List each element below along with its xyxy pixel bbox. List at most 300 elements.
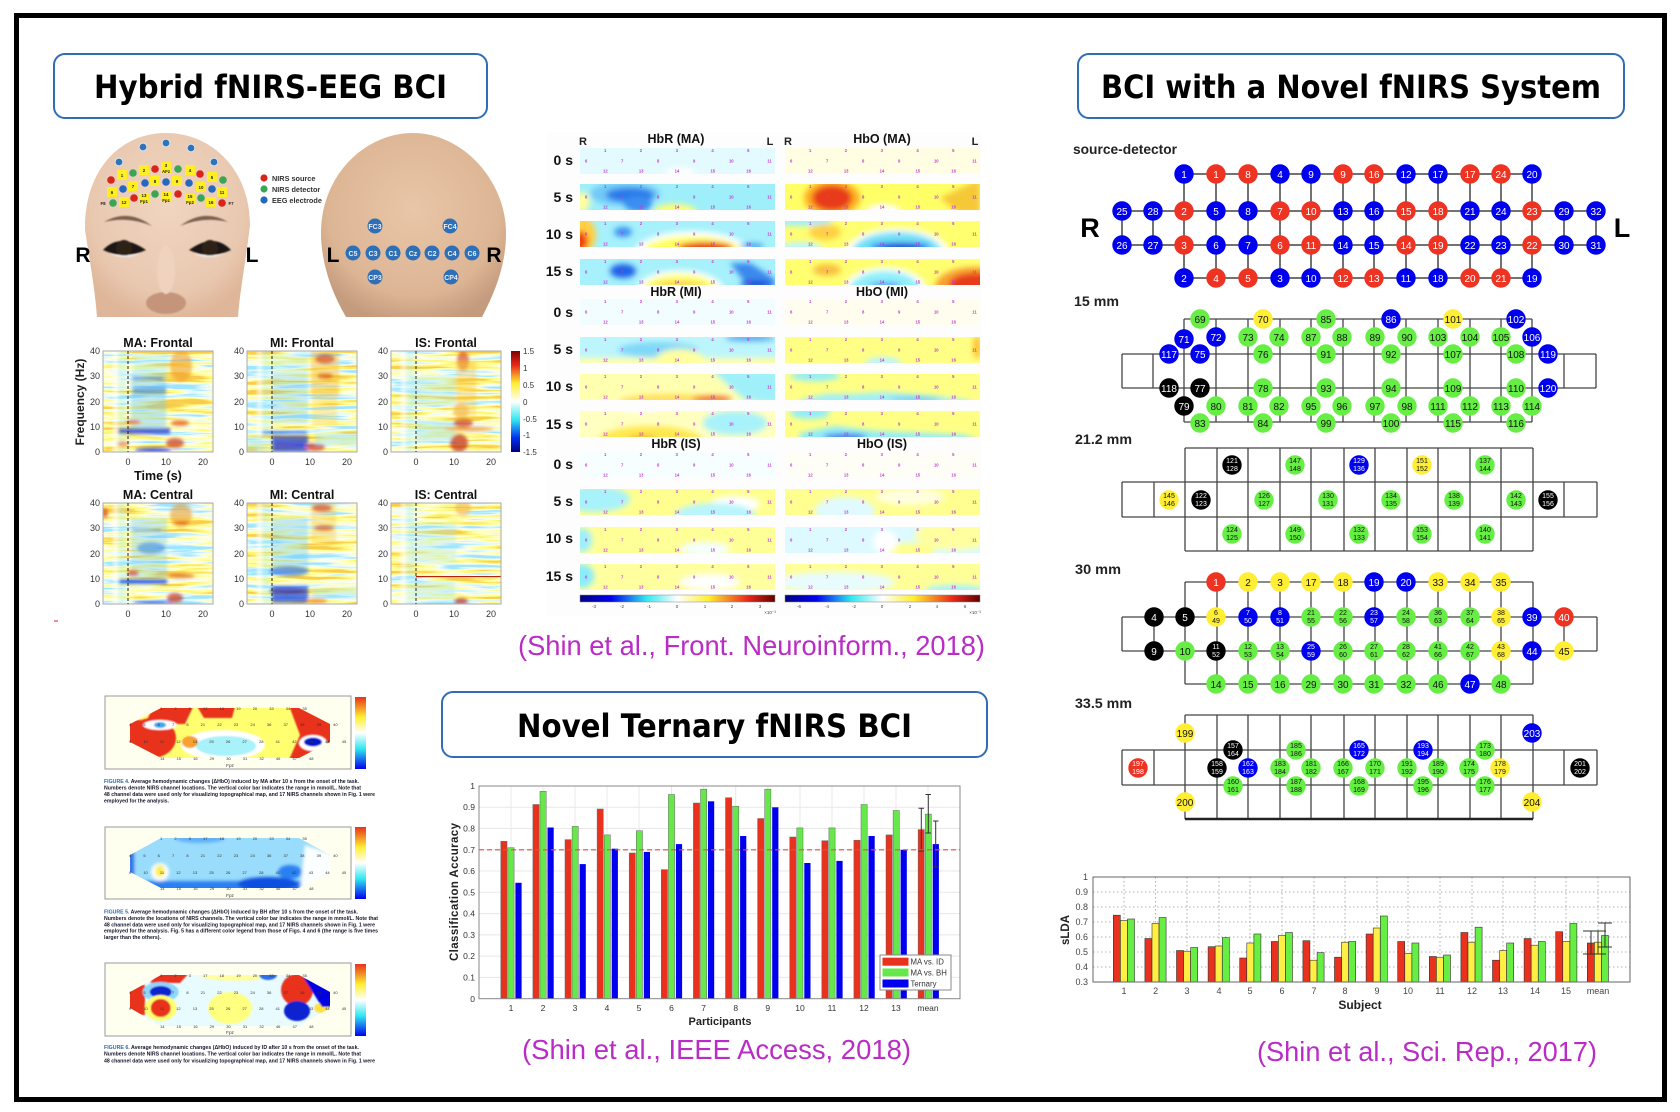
diagram: 21.2 mm channels: 145 <box>1163 493 1175 500</box>
sources (red): 15 <box>1400 207 1412 218</box>
label: 15 mm: 15 mm <box>1074 293 1119 309</box>
detectors (blue): 1 <box>1181 170 1187 181</box>
green channels: 76 <box>1257 350 1269 361</box>
time labels: 10 s <box>546 378 573 394</box>
tick labels: 13 <box>891 1003 901 1013</box>
diagram: 30 mm channels: 17 <box>1305 578 1317 589</box>
montage labels: 15 <box>188 194 193 199</box>
green channels: 88 <box>1336 333 1348 344</box>
legend: Ternary <box>910 980 937 988</box>
montage labels: 3 <box>165 163 168 168</box>
montage labels: 9 <box>176 179 179 184</box>
column and section titles <box>648 132 911 451</box>
green channels: 109 <box>1445 384 1462 395</box>
diagram: 21.2 mm channels: 153 <box>1416 527 1428 534</box>
detectors (blue): 9 <box>1308 170 1314 181</box>
detectors (blue): 27 <box>1147 241 1159 252</box>
spectrogram MI: Central: 10 <box>305 609 315 619</box>
HbR MA 15 s: 1 2 3 4 5 <box>604 259 750 264</box>
column and section titles: HbR (MI) <box>650 285 702 299</box>
tick labels: 10 <box>795 1003 805 1013</box>
HbR MA 0 s <box>580 148 775 176</box>
tick labels: 12 <box>859 1003 869 1013</box>
HbO MI 5 s: 6 7 8 9 10 11 <box>790 347 977 352</box>
green channels: 74 <box>1273 333 1285 344</box>
HbO MA 10 s <box>778 216 980 278</box>
double-numbered channels: 23 <box>1370 610 1378 617</box>
tick labels: 1 <box>470 781 475 791</box>
topographic map: ID <box>105 963 366 1036</box>
HbO MA 10 s: 6 7 8 9 10 11 <box>790 231 977 236</box>
green channels: 82 <box>1273 402 1285 413</box>
HbR IS 5 s <box>560 486 775 527</box>
HbO IS 15 s <box>775 564 985 595</box>
spectrogram IS: Frontal: 0 <box>413 457 419 467</box>
double-numbered channels: 51 <box>1276 618 1284 625</box>
HbO IS 10 s: 1 2 3 4 5 <box>809 527 955 532</box>
sources (red) <box>1174 164 1542 288</box>
diagram: 21.2 mm channels: 129 <box>1353 458 1365 465</box>
diagram: 30 mm channels: 5 <box>1182 613 1188 624</box>
colour bar <box>355 964 366 1036</box>
tick labels: 4 <box>605 1003 610 1013</box>
green channels: 73 <box>1242 333 1254 344</box>
diagram: 21.2 mm channels: 150 <box>1289 535 1301 542</box>
topo colour bars: 3 <box>759 604 762 609</box>
diagram: 33.5 mm channels: 169 <box>1353 787 1365 794</box>
sources (red): 3 <box>1181 241 1187 252</box>
HbR IS 5 s: 1 2 3 4 5 <box>604 489 750 494</box>
green channels: 95 <box>1305 402 1317 413</box>
double-numbered channels: 57 <box>1370 618 1378 625</box>
sources (red): 19 <box>1432 241 1444 252</box>
diagram: 33.5 mm channels: 164 <box>1227 751 1239 758</box>
diagram: 21.2 mm channels: 133 <box>1353 535 1365 542</box>
spectrogram MA: Central: 0 <box>125 609 131 619</box>
tick labels: 13 <box>1498 986 1508 996</box>
diagram: 30 mm channels: 3 <box>1277 578 1283 589</box>
diagram: 30 mm channels: 29 <box>1305 680 1317 691</box>
HbO MA 5 s: 1 2 3 4 5 <box>809 184 955 189</box>
double-numbered channels: 52 <box>1212 652 1220 659</box>
double-numbered channels: 63 <box>1434 618 1442 625</box>
double-numbered channels: 58 <box>1402 618 1410 625</box>
diagram: 33.5 mm channels: 172 <box>1353 751 1365 758</box>
diagram: 21.2 mm channels: 128 <box>1226 466 1238 473</box>
diagram: 21.2 mm channels: 139 <box>1448 501 1460 508</box>
diagram: 33.5 mm channels: 190 <box>1432 769 1444 776</box>
caption: figure 5 <box>104 910 378 941</box>
HbO IS 10 s: 6 7 8 9 10 11 <box>790 537 977 542</box>
spectrogram IS: Frontal: 10 <box>378 422 388 432</box>
topo colour bars: -3 <box>592 604 596 609</box>
sources (red): 6 <box>1277 241 1283 252</box>
spectrogram MA: Central: 30 <box>90 523 100 533</box>
montage labels: 7 <box>132 184 135 189</box>
montage labels: 6 <box>111 190 114 195</box>
spectrogram MI: Central: 30 <box>234 523 244 533</box>
spectrogram colour bar: 0 <box>523 398 528 407</box>
detectors (blue): 21 <box>1464 207 1476 218</box>
front head with NIRS montage: R <box>75 244 91 267</box>
double-numbered channels: 21 <box>1307 610 1315 617</box>
diagram: 33.5 mm channels: 186 <box>1290 751 1302 758</box>
HbR IS 10 s: 6 7 8 9 10 11 <box>585 537 772 542</box>
HbR IS 0 s: 1 2 3 4 5 <box>604 452 750 457</box>
montage legend: EEG electrode <box>272 196 322 205</box>
diagram: 33.5 mm channels: 162 <box>1242 761 1254 768</box>
caption: figure 6: Numbers denote NIRS channel locations. The vertical color bar indicates the range in mmol/L. Note that <box>104 1052 361 1058</box>
spectrogram MI: Frontal: 10 <box>305 457 315 467</box>
double-numbered channels: 26 <box>1339 644 1347 651</box>
diagram: 33.5 mm channels: 188 <box>1290 787 1302 794</box>
tick labels: 7 <box>1311 986 1317 996</box>
HbO MI 0 s: 1 2 3 4 5 <box>809 299 955 304</box>
tick labels <box>463 781 939 1013</box>
detectors (blue): 11 <box>1401 274 1412 285</box>
rear head with EEG montage: C3 <box>369 251 378 258</box>
tick labels: 2 <box>1153 986 1158 996</box>
HbR MI 10 s <box>580 369 780 408</box>
blue channels <box>1159 309 1558 398</box>
montage labels: F8 <box>100 201 106 206</box>
tick labels: 5 <box>637 1003 642 1013</box>
diagram: 33.5 mm channels: 161 <box>1227 787 1239 794</box>
HbO IS 5 s: 6 7 8 9 10 11 <box>790 499 977 504</box>
small red mark <box>54 620 58 622</box>
error bars <box>918 794 938 867</box>
label: 33.5 mm: 33.5 mm <box>1075 695 1132 711</box>
time labels: 10 s <box>546 530 573 546</box>
diagram: source-detector layout <box>1112 164 1606 288</box>
detectors (blue): 31 <box>1590 241 1602 252</box>
tick labels: 4 <box>1216 986 1222 996</box>
time labels: 15 s <box>546 263 573 279</box>
diagram: 33.5 mm channels: 204 <box>1524 798 1541 809</box>
spectrogram colour bar: -0.5 <box>523 415 537 424</box>
double-numbered channels: 7 <box>1246 610 1250 617</box>
HbO MA 15 s: 6 7 8 9 10 11 <box>790 269 977 274</box>
green channels: 81 <box>1242 402 1254 413</box>
green channels: 115 <box>1445 419 1461 430</box>
diagram: 33.5 mm channels: 189 <box>1432 761 1444 768</box>
diagram: 21.2 mm channels: 127 <box>1258 501 1270 508</box>
diagram: 30 mm channels: 46 <box>1432 680 1444 691</box>
HbO MA 5 s: 6 7 8 9 10 11 <box>790 194 977 199</box>
black channels: 118 <box>1161 384 1177 395</box>
diagram: 33.5 mm channels: 191 <box>1401 761 1413 768</box>
HbO MI 0 s <box>785 299 980 325</box>
channel squares <box>107 162 227 207</box>
HbR MA 10 s <box>568 217 775 275</box>
panel: HbR / HbO topographic maps <box>546 132 1015 616</box>
tick labels: 2 <box>541 1003 546 1013</box>
double-numbered channels: 56 <box>1339 618 1347 625</box>
spectrogram IS: Central: 20 <box>486 609 496 619</box>
spectrogram MI: Central <box>234 488 357 619</box>
tick labels: 11 <box>828 1003 837 1013</box>
time labels <box>546 152 573 584</box>
channel numbers: 4 5 6 7 8 21 22 23 24 36 37 38 39 40 <box>129 853 338 858</box>
diagram: 33.5 mm channels: 192 <box>1401 769 1413 776</box>
montage legend <box>260 174 322 205</box>
diagram: 33.5 mm channels: 163 <box>1242 769 1254 776</box>
HbO MI 10 s: 6 7 8 9 10 11 <box>790 384 977 389</box>
label: 21.2 mm: 21.2 mm <box>1075 431 1132 447</box>
HbO MA 10 s: 12 13 14 15 16 <box>808 242 957 246</box>
HbR MA 5 s <box>574 182 775 220</box>
HbR MI 10 s: 12 13 14 15 16 <box>603 394 752 400</box>
green channels: 94 <box>1385 384 1397 395</box>
column and section titles: HbO (MI) <box>856 285 908 299</box>
detectors (blue): 29 <box>1558 207 1570 218</box>
channel numbers: 14 15 16 29 30 31 32 46 47 48 <box>160 756 314 761</box>
tick labels: 1 <box>1121 986 1127 996</box>
time labels: 5 s <box>554 493 573 509</box>
double-numbered channels: 64 <box>1466 618 1474 625</box>
spectrogram MA: Central: 40 <box>90 498 100 508</box>
HbR MI 5 s: 12 13 14 15 16 <box>603 358 752 362</box>
sources (red): 23 <box>1526 207 1538 218</box>
spectrogram MA: Central: 10 <box>161 609 171 619</box>
spectrogram MI: Frontal: 30 <box>234 371 244 381</box>
spectrogram MA: Frontal: 20 <box>198 457 208 467</box>
diagram: 33.5 mm channels: 165 <box>1353 743 1365 750</box>
spectrogram MA: Frontal: 0 <box>125 457 131 467</box>
blue channels: 71 <box>1178 335 1190 346</box>
spectrogram MI: Frontal: 0 <box>269 457 275 467</box>
diagram: 33.5 mm channels: 195 <box>1417 779 1429 786</box>
rear head with EEG montage: CP4 <box>444 275 458 282</box>
diagram: 33.5 mm channels: 199 <box>1177 729 1194 740</box>
HbR IS 15 s <box>570 564 775 590</box>
channel numbers <box>129 836 347 891</box>
spectrogram IS: Central: 40 <box>378 498 388 508</box>
rear head with EEG montage: Cz <box>409 251 418 258</box>
diagram: 30 mm channels: 39 <box>1526 613 1538 624</box>
double-numbered channels: 27 <box>1370 644 1378 651</box>
HbR MI 15 s: 12 13 14 15 16 <box>603 432 752 436</box>
channel numbers: 9 10 11 12 13 25 26 27 28 41 42 43 44 45 <box>129 870 347 875</box>
diagram: 21.2 mm channels: 134 <box>1385 493 1397 500</box>
topo colour bars: 2 <box>731 604 734 609</box>
diagram: 30 mm channels: 47 <box>1464 680 1476 691</box>
tick labels <box>1075 872 1609 996</box>
spectrogram MI: Frontal: 20 <box>342 457 352 467</box>
double-numbered channels: 50 <box>1244 618 1252 625</box>
green channels: 97 <box>1369 402 1381 413</box>
yellow channels: 70 <box>1257 315 1269 326</box>
green channels: 113 <box>1493 402 1509 413</box>
detectors (blue): 6 <box>1213 241 1219 252</box>
tick labels: 0.2 <box>463 951 475 961</box>
green channels: 78 <box>1257 384 1269 395</box>
blue channels: 119 <box>1540 350 1556 361</box>
rear head with EEG montage: R <box>486 244 502 267</box>
time labels: 15 s <box>546 416 573 432</box>
HbR IS 15 s: 1 2 3 4 5 <box>604 564 750 569</box>
topographic map: MA <box>105 696 366 769</box>
heading: BCI with a Novel fNIRS System: BCI with a Novel fNIRS System <box>1101 68 1601 106</box>
double-numbered channels: 41 <box>1434 644 1442 651</box>
double-numbered channels: 22 <box>1339 610 1347 617</box>
legend: MA vs. BH <box>910 968 947 978</box>
tick labels: 1 <box>1083 872 1088 882</box>
tick labels: 3 <box>1184 986 1190 996</box>
diagram: 21.2 mm channels: 144 <box>1479 466 1491 473</box>
caption: figure 5: Numbers denote the locations of NIRS channels. The vertical color bar indicates the range in mmol/L. Note that <box>104 916 378 922</box>
HbO MA 5 s: 12 13 14 15 16 <box>808 204 957 210</box>
diagram: 30 mm channels: 48 <box>1495 680 1507 691</box>
topo colour bars: 4 <box>936 604 939 609</box>
tick labels: 0.5 <box>1075 947 1088 957</box>
blue channels: 102 <box>1508 315 1525 326</box>
double-numbered channels: 49 <box>1212 618 1220 625</box>
tick labels: mean <box>917 1003 939 1013</box>
channel numbers <box>129 973 347 1029</box>
diagram: 30 mm channels: 31 <box>1368 680 1380 691</box>
channel numbers: 14 15 16 29 30 31 32 46 47 48 <box>160 886 314 891</box>
montage labels: Fp1 <box>140 199 148 204</box>
diagram: 33.5 mm channels: 160 <box>1227 779 1239 786</box>
channel numbers: 1 2 3 17 18 19 20 33 34 35 <box>160 836 308 841</box>
spectrogram IS: Central: 0 <box>413 609 419 619</box>
diagram: 33.5 mm channels: 193 <box>1417 743 1429 750</box>
tick labels: 0.7 <box>463 845 475 855</box>
legend: MA vs. ID <box>910 958 944 966</box>
HbR IS 15 s: 12 13 14 15 16 <box>603 584 752 590</box>
sources (red): 18 <box>1432 207 1444 218</box>
diagram: 21.2 mm channels: 138 <box>1448 493 1460 500</box>
spectrogram MI: Central: 0 <box>239 599 244 609</box>
black channels: 77 <box>1194 384 1206 395</box>
montage labels: 8 <box>154 179 157 184</box>
caption: figure 4 <box>104 779 375 804</box>
channel numbers: 9 10 11 12 13 25 26 27 28 41 42 43 44 45 <box>129 739 347 744</box>
HbR MI 0 s: 1 2 3 4 5 <box>604 299 750 304</box>
green channels: 91 <box>1320 350 1332 361</box>
spectrogram IS: Central: 10 <box>449 609 459 619</box>
diagram: 33.5 mm channels: 196 <box>1417 787 1429 794</box>
detectors (blue): 13 <box>1337 207 1349 218</box>
HbO IS 5 s <box>785 489 980 525</box>
diagram: 21.2 mm channels: 146 <box>1163 501 1175 508</box>
double-numbered channels: 11 <box>1212 644 1220 651</box>
spectrogram IS: Central: 30 <box>378 523 388 533</box>
bar chart: sLDA accuracy: Subject <box>1338 998 1382 1012</box>
diagram: 21.2 mm channels: 135 <box>1385 501 1397 508</box>
column and section titles: HbR (MA) <box>648 132 704 146</box>
HbO IS 0 s: 12 13 14 15 16 <box>808 472 957 478</box>
spectrogram MA: Central: 20 <box>198 609 208 619</box>
green channels: 99 <box>1320 419 1332 430</box>
HbO MI 5 s: 1 2 3 4 5 <box>809 337 955 342</box>
HbR IS 0 s: 6 7 8 9 10 11 <box>585 462 772 467</box>
topo colour bars: 1 <box>704 604 707 609</box>
green channels: 92 <box>1385 350 1397 361</box>
diagram: 21.2 mm channels: 147 <box>1289 458 1301 465</box>
double-numbered channels: 66 <box>1434 652 1442 659</box>
rear head with EEG montage: C5 <box>349 251 358 258</box>
spectrogram IS: Frontal: 20 <box>486 457 496 467</box>
diagram: 21.2 mm channels: 136 <box>1353 466 1365 473</box>
spectrogram IS: Central: 20 <box>378 549 388 559</box>
HbR IS 10 s <box>572 527 775 556</box>
HbR MI 0 s: 12 13 14 15 16 <box>603 320 752 324</box>
topo colour bars: -2 <box>852 604 856 609</box>
diagram: 21.2 mm channels: 151 <box>1416 458 1428 465</box>
diagram: 21.2 mm channels: 152 <box>1416 466 1428 473</box>
diagram: 21.2 mm channels: 130 <box>1322 493 1334 500</box>
time labels: 15 s <box>546 568 573 584</box>
spectrogram colour bar: 1 <box>523 364 528 373</box>
green channels: 107 <box>1445 350 1462 361</box>
HbO IS 10 s <box>785 520 995 559</box>
green channels: 110 <box>1508 384 1524 395</box>
sources (red): 10 <box>1305 207 1317 218</box>
diagram: 33.5 mm channels: 182 <box>1305 769 1317 776</box>
HbO MI 5 s: 12 13 14 15 16 <box>808 358 957 362</box>
spectrogram IS: Frontal: 30 <box>378 371 388 381</box>
rear head with EEG montage: C4 <box>448 251 457 258</box>
diagram: 33.5 mm channels: 173 <box>1479 743 1491 750</box>
sources (red): 16 <box>1368 170 1380 181</box>
spectrogram colour bar <box>511 347 537 457</box>
montage labels: 14 <box>164 192 169 197</box>
tick labels: 1 <box>509 1003 514 1013</box>
spectrogram MI: Central: 20 <box>342 609 352 619</box>
tick labels: 0.5 <box>463 888 475 898</box>
sources (red): 9 <box>1340 170 1346 181</box>
montage legend: NIRS source <box>272 174 315 183</box>
double-numbered channels: 67 <box>1466 652 1474 659</box>
tick labels: 0.7 <box>1075 917 1088 927</box>
detectors (blue): 14 <box>1337 241 1349 252</box>
caption: figure 6: 48 channel data were used only for visualizing topographical map, and 17 NIRS channels shown in Fig. 1 were <box>104 1058 375 1064</box>
NIRS detectors <box>109 165 227 207</box>
column and section titles: HbO (MA) <box>853 132 911 146</box>
diagram: 30 mm channels: 32 <box>1400 680 1412 691</box>
green channels: 103 <box>1430 333 1447 344</box>
montage legend: NIRS detector <box>272 185 320 194</box>
HbO MI 5 s <box>785 335 981 371</box>
diagram: 21.2 mm channels: 126 <box>1258 493 1270 500</box>
sources (red): 24 <box>1495 170 1507 181</box>
citation: Sci. Rep.: (Shin et al., Sci. Rep., 2017) <box>1257 1036 1597 1067</box>
detectors (blue): 10 <box>1305 274 1317 285</box>
HbO MA 0 s: 1 2 3 4 5 <box>809 148 955 153</box>
green channels: 90 <box>1401 333 1413 344</box>
green channels: 87 <box>1305 333 1317 344</box>
green channels: 69 <box>1194 315 1206 326</box>
tick labels: 0.1 <box>463 972 475 982</box>
spectrogram MA: Central: 20 <box>90 549 100 559</box>
diagram: 30 mm channels: 35 <box>1495 578 1507 589</box>
tick labels: 0.4 <box>463 908 475 918</box>
caption: figure 4: Numbers denote NIRS channel locations. The vertical color bar indicates the range in mmol/L. Note that <box>104 786 361 792</box>
diagram: 33.5 mm channels: 197 <box>1132 761 1144 768</box>
caption: figure 4: 48 channel data were used only for visualizing topographical map, and 17 NIRS channels shown in Fig. 1 were <box>104 792 375 798</box>
heading: Novel Ternary fNIRS BCI: Novel Ternary fNIRS BCI <box>517 707 912 745</box>
HbR IS 10 s: 1 2 3 4 5 <box>604 527 750 532</box>
diagram: 30 mm channels: 1 <box>1213 578 1219 589</box>
montage labels: 10 <box>199 185 204 190</box>
rear head with EEG montage: C1 <box>389 251 398 258</box>
spectrogram MA: Frontal: 10 <box>90 422 100 432</box>
black channels: 79 <box>1178 402 1190 413</box>
HbO MI 10 s <box>785 371 980 406</box>
detectors (blue): 26 <box>1116 241 1128 252</box>
